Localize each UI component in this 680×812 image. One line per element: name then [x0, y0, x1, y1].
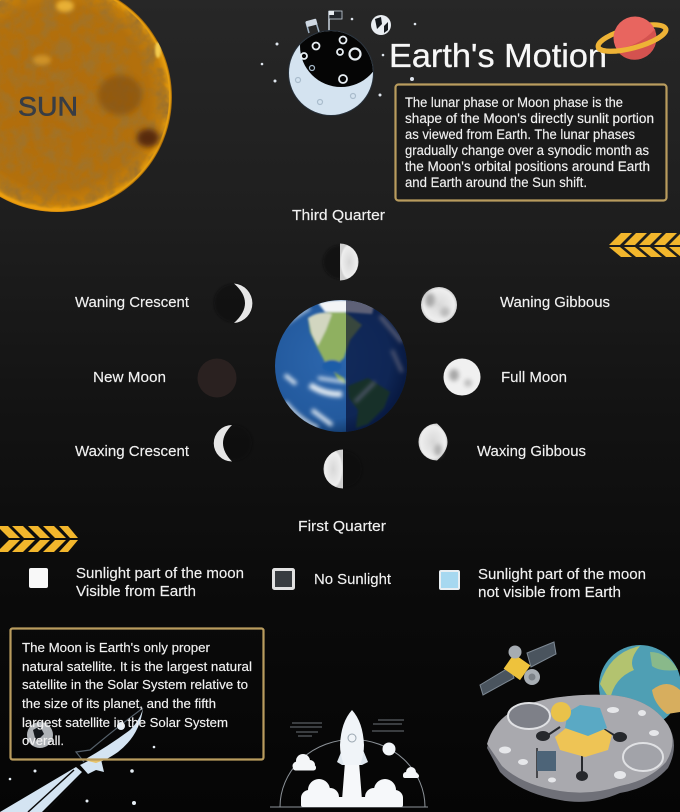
moon facts text: the size of its planet, and the fifth [22, 696, 216, 711]
description text: gradually change over a synodic month as [405, 143, 649, 158]
moon: new moon [198, 358, 236, 398]
legend: visible sunlight: Sunlight part of the moon [76, 565, 244, 582]
description text: and Earth around the Sun shift. [405, 175, 587, 190]
moon phase labels: Full Moon [501, 369, 567, 386]
legend: sunlight not visible: not visible from Earth [478, 584, 621, 601]
legend: no sunlight [274, 570, 392, 588]
rocket body [337, 745, 368, 765]
icon: rocket launch [270, 710, 428, 807]
legend: visible sunlight [29, 565, 244, 600]
moon: third quarter [323, 244, 358, 280]
moon: waxing gibbous [418, 424, 448, 460]
sun label: SUN [18, 92, 78, 122]
chevrons: bottom left [0, 526, 78, 552]
moon: full moon [444, 358, 480, 396]
moon: waning gibbous [421, 287, 457, 323]
icon: cartoon earth [599, 645, 680, 727]
moon facts text: overall. [22, 733, 64, 748]
moon phase labels [75, 207, 610, 535]
description text: as viewed from Earth. The lunar phases [405, 127, 635, 142]
moon facts text: The Moon is Earth's only proper [22, 640, 211, 655]
description text: the Moon's orbital positions around Earth [405, 159, 650, 174]
legend: sunlight not visible: Sunlight part of the moon [478, 566, 646, 583]
icon: satellite [480, 642, 556, 695]
icon: ringed planet [596, 16, 668, 60]
legend: visible sunlight: Visible from Earth [76, 583, 196, 600]
moon phase labels: Waning Gibbous [500, 294, 610, 311]
icon: moon with flag and small globe [261, 5, 416, 116]
moon: waxing crescent [214, 425, 252, 462]
moon phase labels: Third Quarter [292, 207, 385, 224]
description text [405, 95, 654, 190]
small left cloud [292, 754, 316, 770]
description text: The lunar phase or Moon phase is the [405, 95, 623, 110]
icon: moon base with lander [487, 695, 674, 802]
panel: lunar phase description [396, 84, 666, 200]
moon facts text: largest satellite in the Solar System [22, 715, 228, 730]
moon facts text: satellite in the Solar System relative to [22, 677, 248, 692]
moon facts text: natural satellite. It is the largest natural [22, 659, 252, 674]
description text: shape of the Moon's directly sunlit portion [405, 111, 654, 126]
exhaust clouds [301, 762, 403, 807]
moon phase labels: First Quarter [298, 518, 386, 535]
panel: moon facts [10, 628, 264, 760]
moon phase labels: Waxing Gibbous [477, 443, 586, 460]
icon: sun [0, 0, 172, 212]
icon: earth [275, 300, 408, 440]
small right cloud [403, 767, 419, 778]
chevrons: top right [609, 233, 680, 257]
icon: rocket flying lower left [0, 708, 155, 812]
moon: waning crescent [214, 284, 252, 323]
moon facts text [22, 640, 252, 748]
title: Earth's Motion [389, 37, 607, 74]
moon phase labels: Waxing Crescent [75, 443, 190, 460]
moon phase labels: Waning Crescent [75, 294, 190, 311]
legend: no sunlight: No Sunlight [314, 571, 392, 588]
moon phase labels: New Moon [93, 369, 166, 386]
legend: sunlight not visible [440, 566, 646, 601]
moon: first quarter [324, 450, 362, 488]
